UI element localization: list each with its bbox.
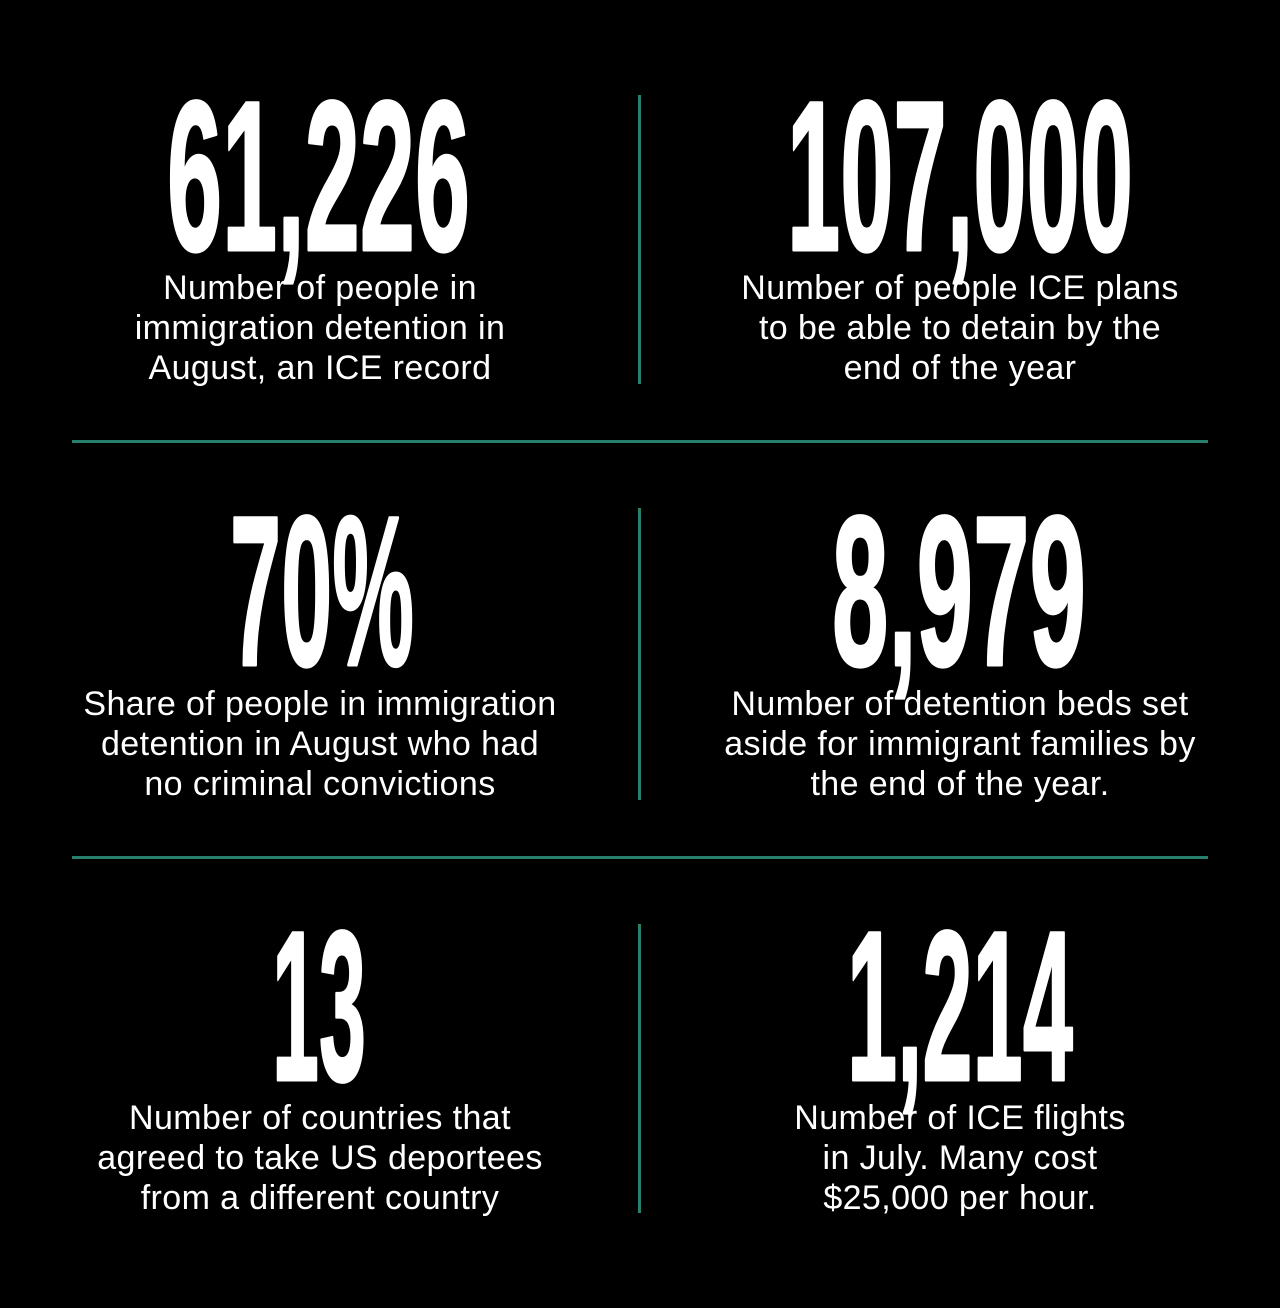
text: countries: from a different country — [141, 1179, 499, 1217]
text: flights: $25,000 per hour. — [823, 1179, 1097, 1217]
text: detention august — [135, 269, 505, 387]
text: detention august: Number of people in — [163, 269, 477, 307]
big numbers: 70% — [230, 472, 414, 711]
text: countries — [97, 1099, 543, 1217]
text: detention august: immigration detention in — [135, 309, 505, 347]
text: flights: Number of ICE flights — [794, 1099, 1126, 1137]
text: ICE plans: end of the year — [844, 349, 1076, 387]
text: family beds: the end of the year. — [810, 765, 1110, 803]
text: family beds — [724, 685, 1196, 803]
text: countries: Number of countries that — [129, 1099, 511, 1137]
text: ICE plans: Number of people ICE plans — [741, 269, 1179, 307]
text: no convictions — [83, 685, 557, 803]
text: family beds: Number of detention beds set — [731, 685, 1189, 723]
text: no convictions: Share of people in immigration — [83, 685, 557, 723]
big numbers: 13 — [272, 887, 366, 1126]
text: flights — [794, 1099, 1126, 1217]
text: countries: agreed to take US deportees — [97, 1139, 543, 1177]
big numbers: 61,226 — [167, 57, 470, 296]
text: no convictions: detention in August who had — [101, 725, 539, 763]
text: detention august: August, an ICE record — [149, 349, 491, 387]
divider lines — [72, 440, 1208, 443]
text: ICE plans — [741, 269, 1179, 387]
text: no convictions: no criminal convictions — [144, 765, 496, 803]
text: flights: in July. Many cost — [823, 1139, 1097, 1177]
text: ICE plans: to be able to detain by the — [759, 309, 1161, 347]
text: family beds: aside for immigrant families by — [724, 725, 1196, 763]
